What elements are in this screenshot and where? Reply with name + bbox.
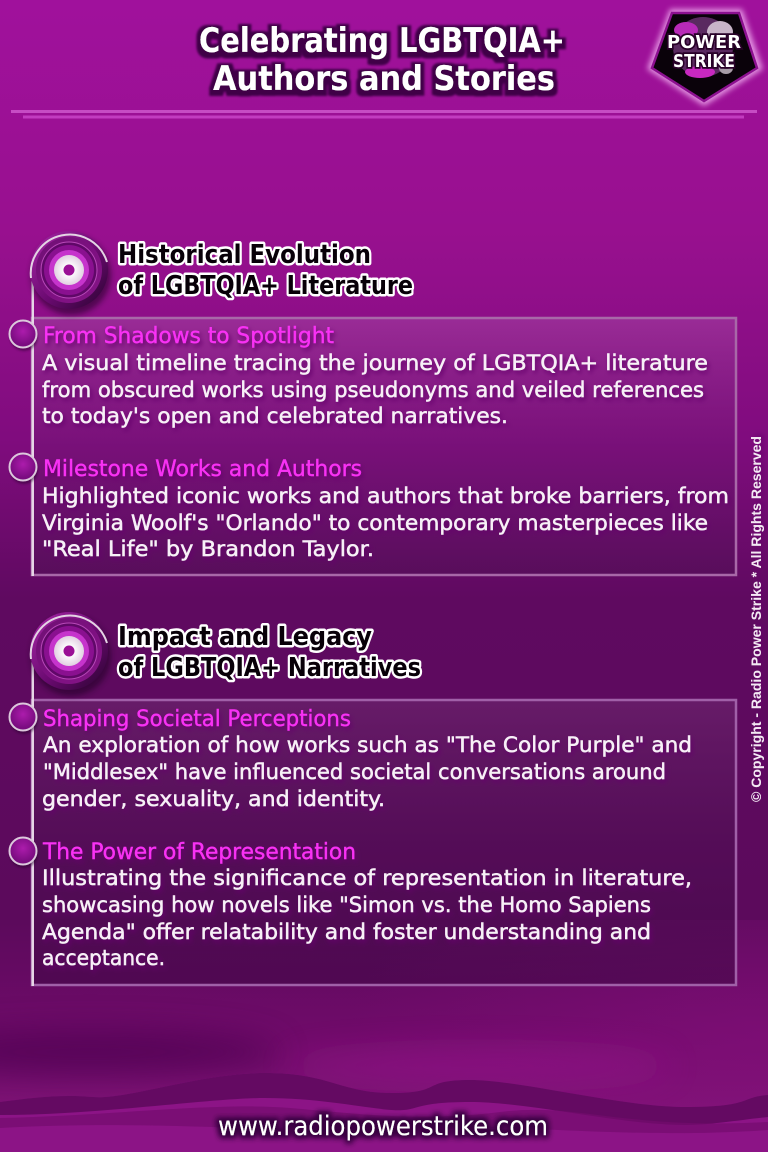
title: Authors and Stories: [213, 59, 555, 99]
bullet marker 3: [10, 704, 38, 734]
subsection: Milestone Works and Authors: "Real Life" by Brandon Taylor.: [42, 537, 374, 562]
subsection: Shaping Societal Perceptions: gender, sexuality, and identity.: [42, 787, 385, 812]
bullet marker 1: [10, 320, 38, 351]
section heading 2: [118, 622, 421, 683]
panel 2 box: [32, 700, 736, 985]
subsection: From Shadows to Spotlight: to today's open and celebrated narratives.: [42, 404, 508, 429]
subsection: The Power of Representation: [42, 839, 692, 971]
subsection: The Power of Representation: showcasing how novels like "Simon vs. the Homo Sapiens: [42, 893, 651, 918]
subsection: Milestone Works and Authors: Milestone Works and Authors: [43, 456, 362, 482]
subsection: Shaping Societal Perceptions: An exploration of how works such as "The Color Purple" and: [43, 733, 692, 758]
subsection: The Power of Representation: acceptance.: [42, 946, 165, 971]
subsection: From Shadows to Spotlight: from obscured works using pseudonyms and veiled references: [42, 378, 704, 403]
subsection: From Shadows to Spotlight: [42, 323, 708, 429]
footer url: www.radiopowerstrike.com: [218, 1111, 548, 1142]
bullet marker 2: [10, 454, 38, 484]
subsection: From Shadows to Spotlight: A visual timeline tracing the journey of LGBTQIA+ literature: [42, 351, 708, 376]
title: Celebrating LGBTQIA+: [199, 21, 565, 61]
bullet marker 4: [10, 838, 38, 868]
panel: impact and legacy: [10, 612, 736, 986]
section heading 1: [118, 240, 413, 301]
icon: target badge 1: [30, 231, 111, 315]
panel 2 timeline line: [32, 651, 34, 986]
subsection: Milestone Works and Authors: Virginia Woolf's "Orlando" to contemporary masterpieces like: [42, 511, 708, 536]
section heading 1: of LGBTQIA+ Literature: [118, 271, 413, 301]
section heading 1: Historical Evolution: [118, 240, 371, 270]
subsection: The Power of Representation: The Power of Representation: [42, 839, 356, 865]
subsection: The Power of Representation: Agenda" offer relatability and foster understanding and: [42, 920, 651, 945]
subsection: Shaping Societal Perceptions: "Middlesex" have influenced societal conversations around: [43, 760, 666, 785]
subsection: Shaping Societal Perceptions: [42, 706, 692, 812]
subsection: The Power of Representation: Illustrating the significance of representation in literature,: [42, 866, 692, 891]
icon: target badge 2: [30, 612, 111, 696]
panel 1 timeline line: [32, 270, 34, 576]
section heading 2: of LGBTQIA+ Narratives: [118, 653, 421, 683]
subsection: From Shadows to Spotlight: From Shadows to Spotlight: [43, 323, 334, 349]
subsection: Milestone Works and Authors: [42, 456, 729, 562]
subsection: Milestone Works and Authors: Highlighted iconic works and authors that broke barriers, from: [42, 484, 729, 509]
header divider: [11, 110, 757, 118]
subsection: Shaping Societal Perceptions: Shaping Societal Perceptions: [43, 706, 351, 732]
title: [199, 21, 565, 99]
logo: Power Strike: [647, 9, 763, 106]
panel 1 box: [32, 318, 736, 575]
section heading 2: Impact and Legacy: [118, 622, 372, 652]
panel: historical evolution: [10, 231, 736, 576]
logo: Power Strike: POWER: [667, 32, 741, 53]
logo: Power Strike: STRIKE: [673, 51, 735, 72]
copyright note: © Copyright - Radio Power Strike * All Rights Reserved: [748, 436, 764, 802]
